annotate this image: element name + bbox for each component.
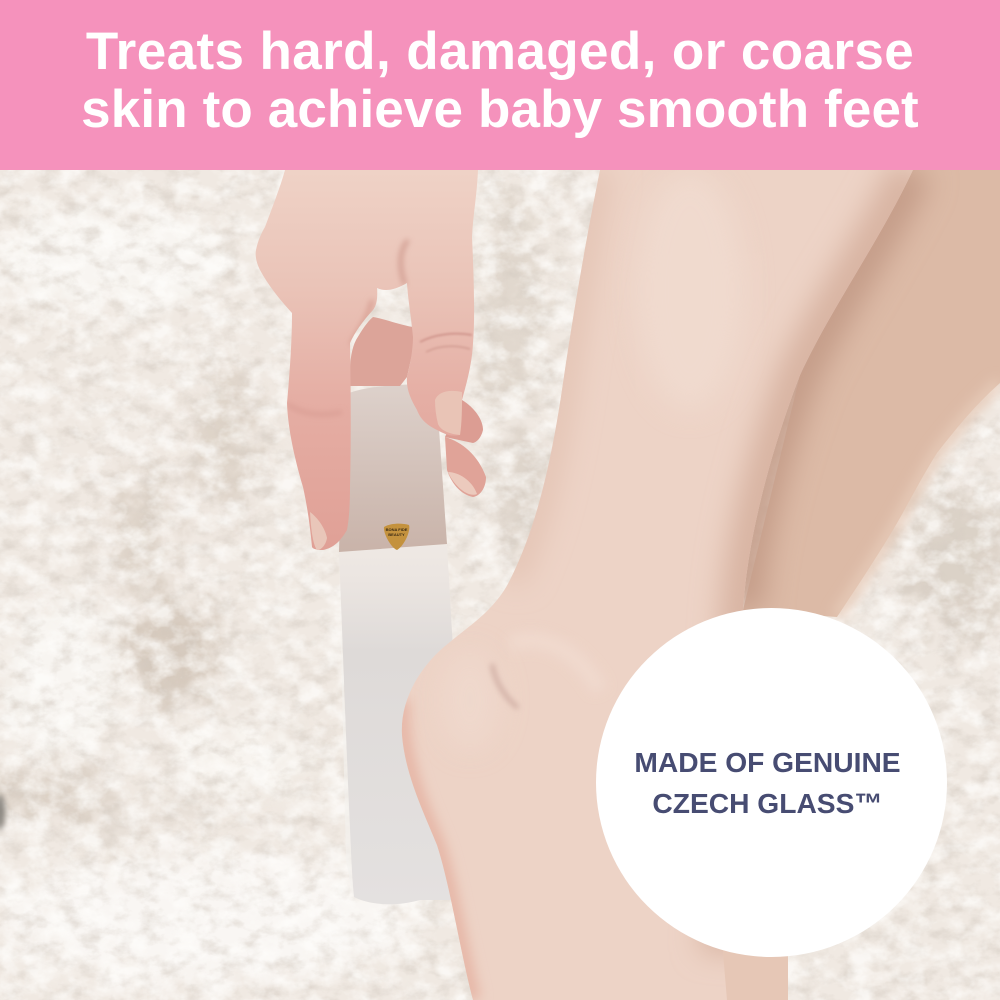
- hand with fingers: [256, 170, 486, 550]
- callout text: CZECH GLASS™: [652, 787, 883, 819]
- nail: right finger: [435, 391, 462, 435]
- callout text: MADE OF GENUINE: [634, 746, 901, 778]
- back leg: [743, 170, 1000, 617]
- heel flush: [402, 700, 473, 1000]
- foot file: glass: [339, 384, 455, 904]
- front leg and heel: [402, 170, 913, 1000]
- callout circle: [596, 608, 947, 957]
- banner: [0, 0, 1000, 170]
- ankle crease: [492, 664, 518, 708]
- title: skin to achieve baby smooth feet: [81, 80, 919, 139]
- title: [81, 22, 919, 139]
- title: Treats hard, damaged, or coarse: [86, 22, 914, 81]
- back fingers: [350, 317, 413, 386]
- nail: left finger: [310, 512, 327, 550]
- gold triangle logo: [384, 524, 409, 550]
- back foot toe area: [721, 950, 788, 1000]
- main hand and fingers: [256, 170, 478, 550]
- callout text: [634, 746, 901, 819]
- shading on fingers: [401, 240, 408, 285]
- gold triangle logo: BEAUTY: [388, 532, 405, 537]
- gold triangle logo: BONA FIDE: [386, 527, 408, 532]
